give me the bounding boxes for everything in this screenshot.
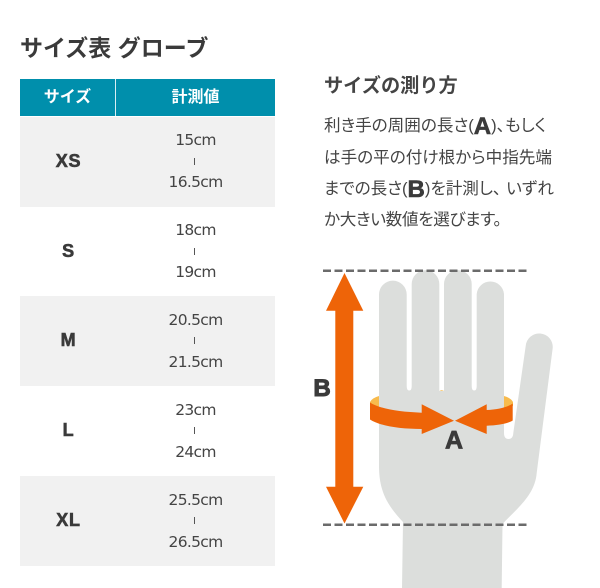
row: XS	[20, 117, 275, 207]
table header: 計測値	[171, 89, 220, 106]
instructions text	[324, 113, 554, 229]
row: XL: 26.5cm	[169, 533, 222, 551]
row: XS: 15cm	[175, 131, 216, 149]
size table	[20, 79, 275, 566]
row: XL: 25.5cm	[169, 491, 222, 509]
row: XS: 16.5cm	[169, 173, 222, 191]
row: L: L	[63, 420, 74, 440]
row: S: S	[62, 241, 75, 261]
table header: サイズ	[44, 89, 91, 106]
row: XL	[20, 476, 275, 566]
row: S: 19cm	[175, 263, 216, 281]
row: XS: XS	[56, 151, 81, 171]
how to measure heading: サイズの測り方	[324, 76, 458, 97]
arrow: length B	[326, 273, 363, 524]
table header	[20, 79, 275, 116]
label: B: B	[313, 375, 331, 402]
icon: hand	[379, 270, 553, 588]
row: L: 23cm	[175, 401, 216, 419]
row: XL: XL	[56, 510, 81, 530]
row: L: 24cm	[175, 443, 216, 461]
instructions text: までの長さ(B)を計測し、 いずれ	[324, 176, 554, 203]
instructions text: 利き手の周囲の長さ(A)、もしく	[324, 113, 546, 140]
row: S: 18cm	[175, 221, 216, 239]
dashed line: top	[323, 270, 527, 272]
row: S	[62, 221, 216, 281]
instructions text: は手の平の付け根から中指先端	[324, 148, 552, 167]
title: サイズ表 グローブ	[20, 35, 208, 61]
row: M: 20.5cm	[169, 311, 222, 329]
row: M: 21.5cm	[169, 353, 222, 371]
row: M: M	[61, 330, 76, 350]
row: L	[63, 401, 216, 461]
measurement band A	[370, 390, 513, 434]
label: A: A	[445, 426, 463, 454]
dashed line: bottom	[323, 523, 527, 526]
instructions text: か大きい数値を選びます。	[324, 210, 501, 229]
row: M	[20, 296, 275, 386]
